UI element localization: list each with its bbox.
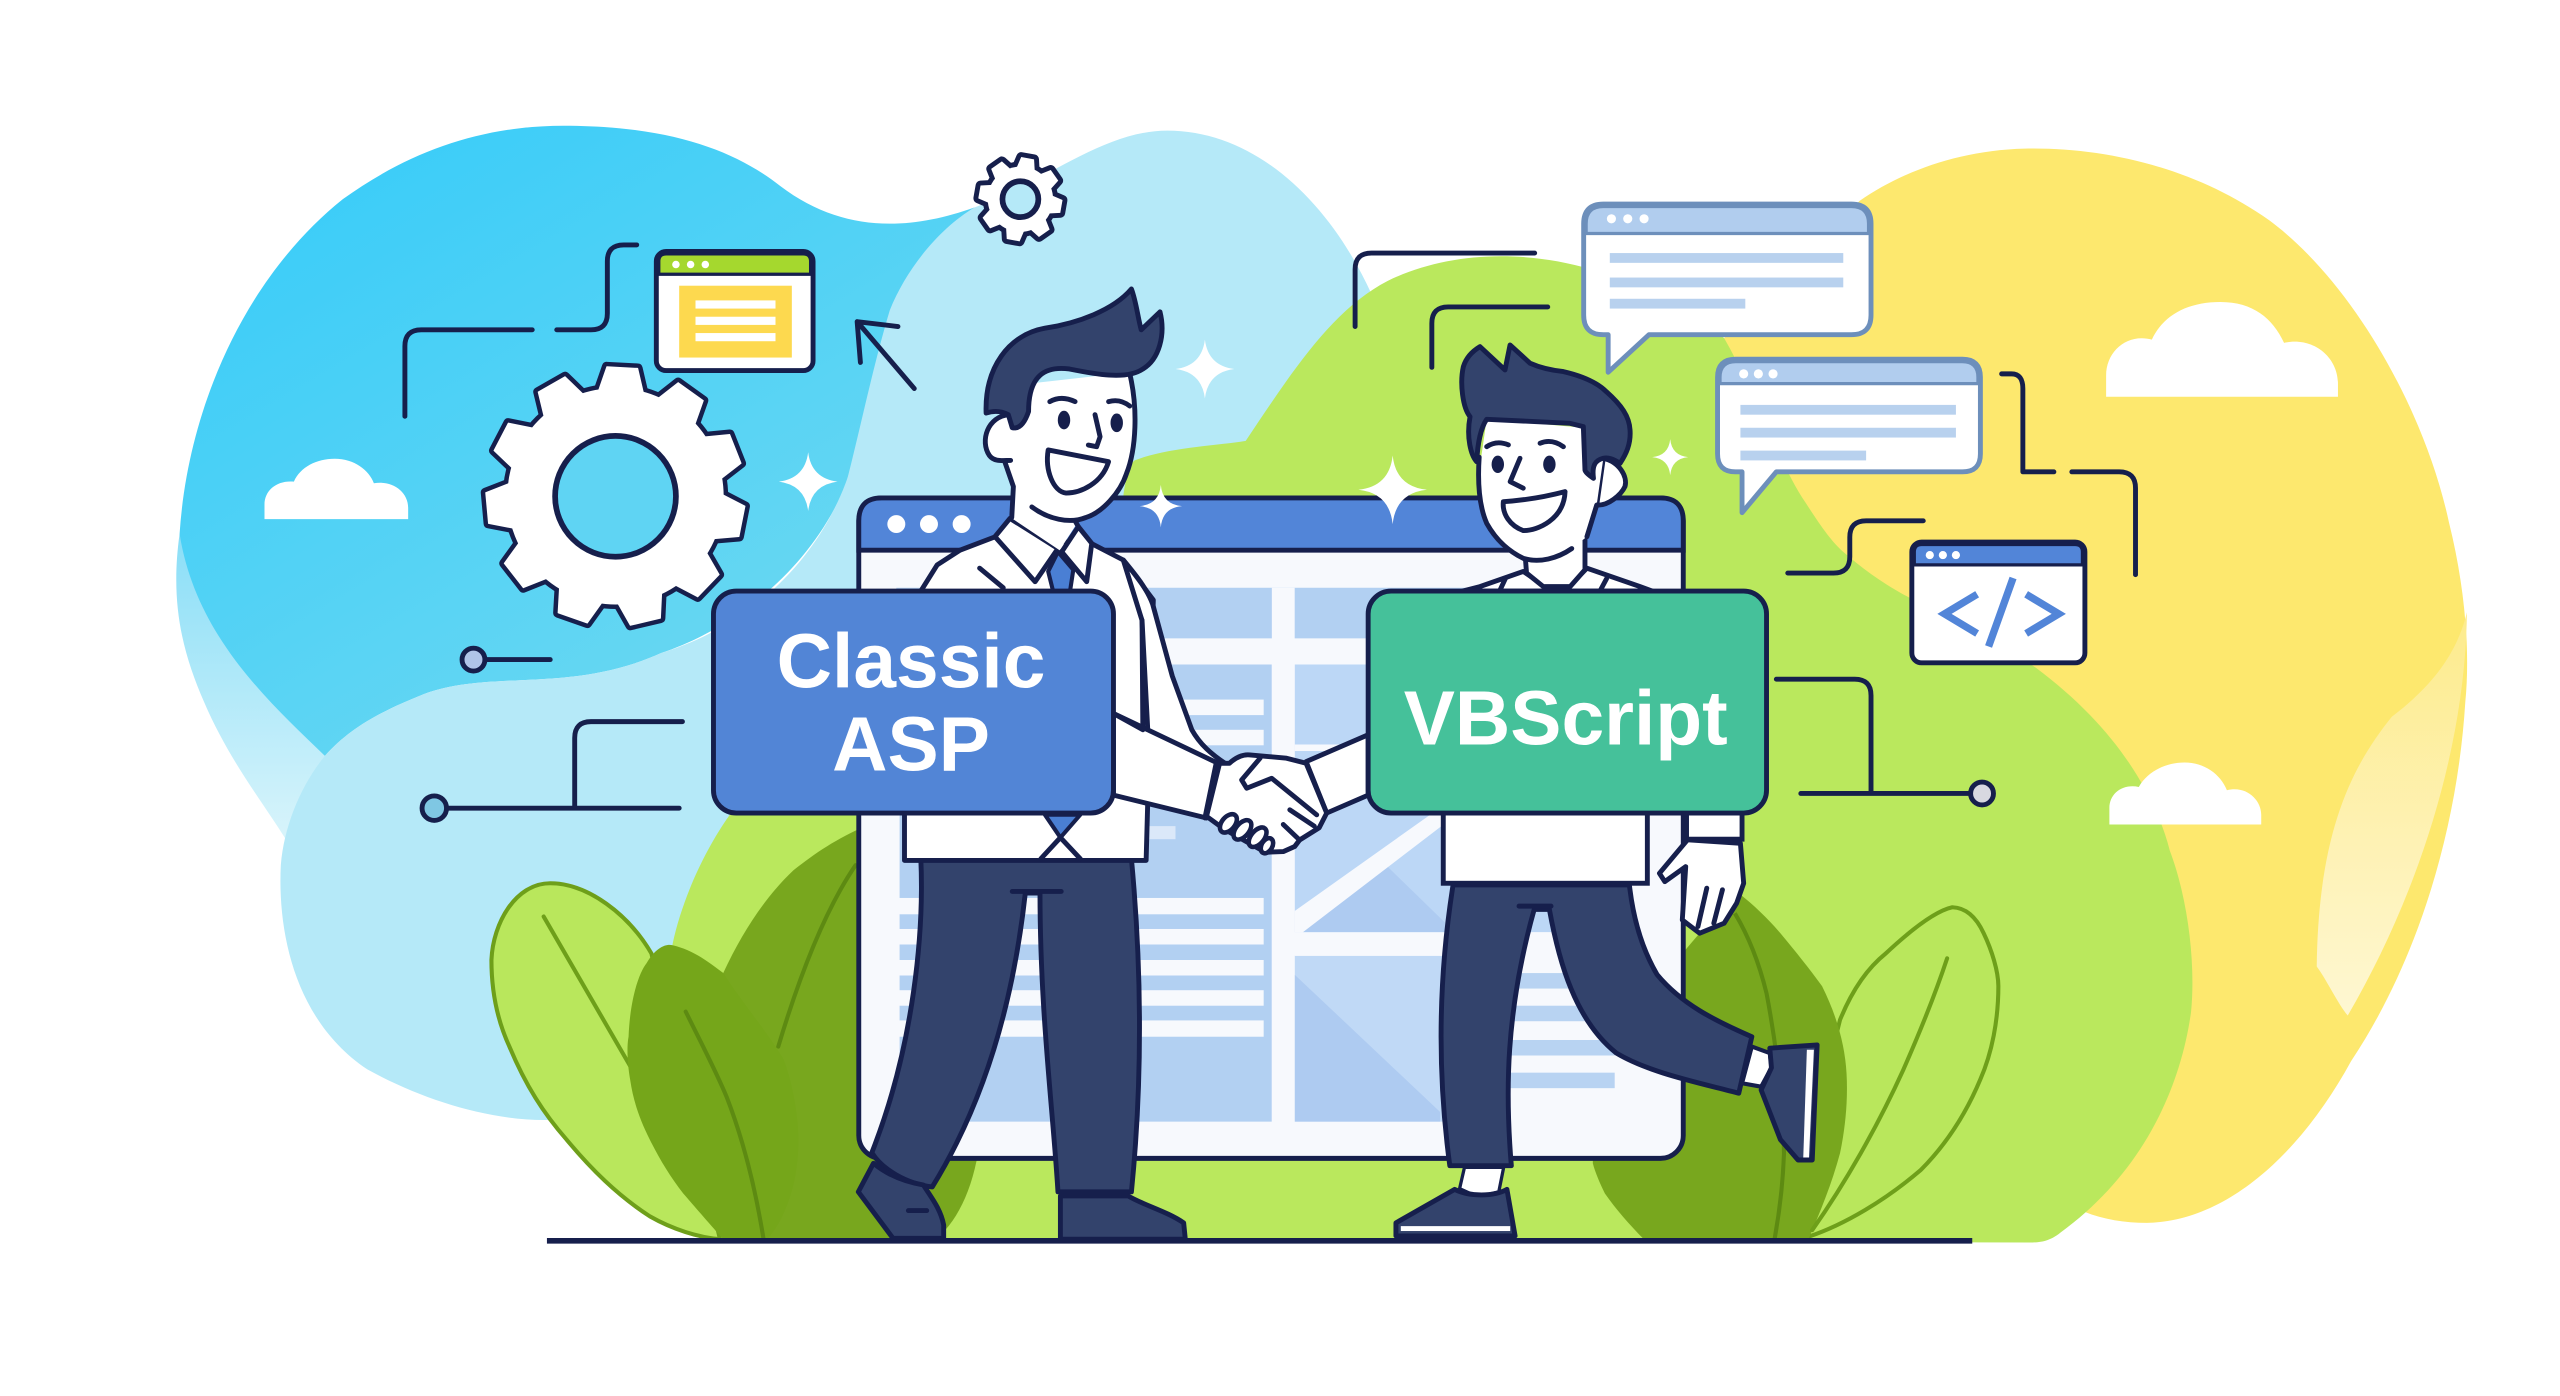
blob: light blue upper: [824, 131, 1371, 620]
eyes: [1492, 456, 1556, 473]
sparkles: [779, 340, 1688, 527]
vest tip: [1045, 815, 1080, 838]
content: shaded triangles: [1295, 864, 1445, 1122]
right forearm: [1306, 735, 1368, 813]
waist bar: [1012, 890, 1061, 893]
tie: [1048, 552, 1073, 591]
trousers: [872, 859, 1139, 1192]
shirt fold: [980, 568, 1003, 588]
left plants: [491, 826, 980, 1241]
connector: right middle: [1788, 521, 1923, 573]
torso: [904, 537, 1153, 860]
connector: right lower: [1776, 679, 1993, 805]
character: right man: [1396, 345, 1817, 1236]
leaf: dark green: [1593, 893, 1847, 1239]
vest lines: [1041, 838, 1080, 859]
lace: [908, 1209, 927, 1212]
face outline: [1005, 374, 1135, 527]
leaf: light green: [1805, 907, 1998, 1237]
brows and nose: [1050, 398, 1130, 447]
handshake: [1207, 735, 1368, 855]
connector: top left: [405, 245, 637, 416]
background blobs: [176, 126, 2467, 1242]
upper shirt: [1463, 568, 1652, 591]
window dots: [887, 515, 971, 533]
hair: [986, 289, 1162, 428]
leaf: light green: [491, 883, 720, 1239]
shoe right: [1761, 1045, 1817, 1160]
hair: [1462, 345, 1630, 478]
icon: small yellow window: [656, 251, 813, 371]
connector: dot lower: [422, 722, 682, 820]
ear: [985, 415, 1011, 461]
leaf vein: [778, 865, 856, 1047]
collar: [995, 518, 1092, 582]
speech bubble 1: [1584, 204, 1871, 372]
arm: [1113, 560, 1226, 818]
blob: sky blue: [180, 126, 975, 756]
sign: VBScript: VBScript: [1404, 676, 1728, 761]
blob: green: [669, 256, 2192, 1242]
leaf: dark green front: [627, 945, 798, 1239]
neck: [1525, 531, 1585, 587]
leaf vein: [1812, 958, 1947, 1230]
character: left man: [858, 289, 1226, 1239]
leaf vein: [686, 1012, 763, 1238]
sign: Classic ASP: ASP: [832, 703, 990, 788]
face: [1478, 419, 1603, 562]
main browser window: [859, 498, 1683, 1158]
icon: small gear: [978, 156, 1063, 242]
leaf vein: [1735, 913, 1784, 1238]
ear: [1597, 458, 1626, 505]
shirt collar ticks: [1500, 579, 1607, 591]
speech bubble 2: [1718, 359, 1980, 513]
mouth: [1503, 492, 1565, 531]
connector: top centre second: [1432, 307, 1548, 367]
sign: Classic ASP: Classic: [777, 619, 1045, 704]
mouth: [1047, 450, 1109, 493]
finger lines: [1698, 888, 1722, 927]
sleeve: [1687, 800, 1742, 839]
cloud: right upper: [2106, 302, 2338, 397]
thumb and finger lines: [1242, 758, 1317, 840]
shoe right sole: [1803, 1050, 1814, 1158]
content: right text rows: [1510, 973, 1615, 1088]
right shoe: [1060, 1196, 1185, 1239]
hand: [1659, 840, 1744, 933]
blob: light blue lower: [280, 457, 980, 1120]
face outline: [1479, 457, 1597, 560]
arm crease: [1113, 620, 1216, 818]
blob: outer light blue band: [176, 534, 351, 839]
ankle right: [1742, 1047, 1771, 1087]
cloud: left: [264, 459, 408, 519]
window body: [859, 498, 1683, 1158]
connector: top centre: [1355, 253, 1535, 327]
trousers: [1441, 885, 1752, 1166]
shoe left: [1396, 1189, 1515, 1236]
shoe left sole: [1401, 1226, 1510, 1231]
leaf: large dark green: [723, 826, 980, 1241]
content panel: right lower cell: [1295, 955, 1451, 1122]
sign: Classic ASP: [713, 591, 1113, 813]
content panel: right upper cell: [1295, 664, 1615, 932]
right plants: [1593, 893, 1998, 1239]
connector: dot upper: [462, 648, 550, 671]
content: grid lines: [896, 588, 1615, 1123]
face: [1004, 372, 1135, 550]
blob: yellow: [1724, 148, 2467, 1223]
cloud: right lower: [2109, 762, 2261, 824]
sign: VBScript: [1368, 591, 1767, 813]
brows and nose: [1487, 441, 1563, 488]
ground line: [547, 1239, 1972, 1243]
leaf vein: [544, 917, 630, 1066]
icon: large gear: [485, 366, 747, 627]
connector: right upper: [2002, 374, 2136, 575]
eyes: [1058, 411, 1123, 432]
blob: pale yellow band: [2317, 612, 2467, 1016]
fingers left hand: [1217, 811, 1276, 855]
content panel: top row: [896, 588, 1615, 664]
waist bar: [1519, 905, 1551, 908]
torso: [1443, 784, 1647, 883]
ankle left: [1460, 1167, 1504, 1197]
icon: code window: [1912, 542, 2085, 663]
left shoe: [858, 1163, 944, 1238]
hands: [1207, 755, 1327, 852]
arrow: [857, 322, 914, 389]
content panel: left column: [900, 664, 1272, 1122]
window header: [859, 498, 1683, 550]
